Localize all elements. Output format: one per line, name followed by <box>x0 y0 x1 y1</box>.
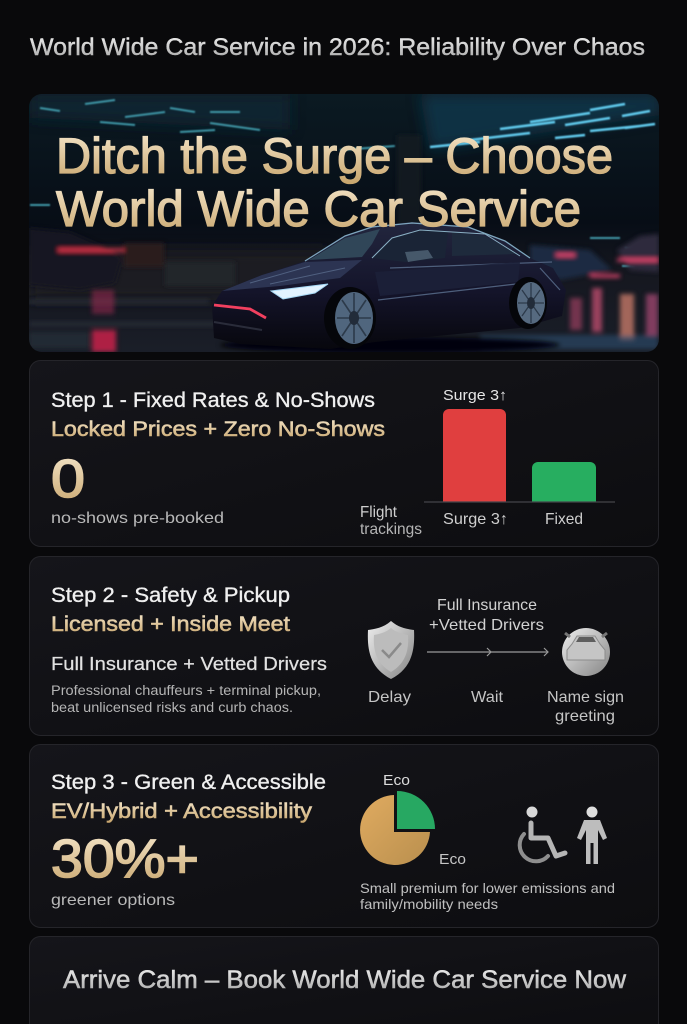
body highlights <box>378 262 560 300</box>
bar chart: Surge 3↑ <box>443 387 507 404</box>
pickup flow label <box>429 597 544 634</box>
blurred left car <box>29 228 235 290</box>
hero headline: World Wide Car Service <box>56 181 581 237</box>
icon: wheelchair <box>520 806 565 861</box>
step 2 lead: Full Insurance + Vetted Drivers <box>51 653 327 674</box>
arrow <box>427 648 548 656</box>
panel: step 1 <box>30 360 658 546</box>
step 3 subheading: EV/Hybrid + Accessibility <box>51 799 312 823</box>
step 2 heading: Step 2 - Safety & Pickup <box>51 583 290 607</box>
flow labels: Name sign <box>547 689 624 706</box>
ceiling lights <box>30 100 655 266</box>
hero headline: Ditch the Surge – Choose <box>56 128 613 184</box>
pie chart <box>360 772 466 868</box>
stat: zero: 0 <box>51 449 85 509</box>
stat caption: no-shows pre-booked <box>51 510 224 527</box>
red light bar <box>214 305 266 318</box>
bar chart: Fixed <box>545 511 583 528</box>
car <box>212 222 566 353</box>
hero headline <box>56 128 613 237</box>
panel: call to action <box>30 936 658 1024</box>
flow labels <box>368 689 624 725</box>
step 2 description: beat unlicensed risks and curb chaos. <box>51 700 293 715</box>
step 2 description: Professional chauffeurs + terminal pickup, <box>51 683 321 698</box>
stat caption: greener options <box>51 892 175 909</box>
bar chart: Surge 3↑ <box>443 511 508 528</box>
step 3 note: Small premium for lower emissions and <box>360 880 615 896</box>
blurred right cars <box>530 234 659 280</box>
ceiling glow <box>29 94 660 300</box>
headlight <box>271 284 328 299</box>
pickup flow label: Full Insurance <box>437 597 537 614</box>
hood <box>222 260 362 291</box>
step 1 subheading: Locked Prices + Zero No-Shows <box>51 417 385 441</box>
bar chart: trackings <box>360 521 422 538</box>
title: World Wide Car Service in 2026: Reliability Over Chaos <box>30 34 645 61</box>
pie chart: Eco <box>383 772 410 789</box>
bar chart <box>360 387 615 538</box>
pillar <box>397 135 421 230</box>
step 3 heading: Step 3 - Green & Accessible <box>51 770 326 794</box>
icon: car badge <box>562 628 610 676</box>
step 3 note: family/mobility needs <box>360 896 498 912</box>
pie chart: Eco <box>439 851 466 868</box>
bar chart: Flight <box>360 504 398 521</box>
flow labels: Wait <box>471 689 504 706</box>
flow labels: Delay <box>368 689 411 706</box>
call to action text: Arrive Calm – Book World Wide Car Service Now <box>63 966 627 994</box>
step 2 subheading: Licensed + Inside Meet <box>51 612 290 636</box>
step 1 heading: Step 1 - Fixed Rates & No-Shows <box>51 388 375 412</box>
panel: step 3 <box>30 744 658 928</box>
flow labels: greeting <box>555 708 615 725</box>
icon: person <box>577 806 607 864</box>
step 2 description <box>51 683 321 715</box>
icon: shield <box>368 621 414 679</box>
step 3 note <box>360 880 615 912</box>
rear wheel <box>509 277 547 329</box>
wet floor reflections <box>29 288 658 352</box>
pickup flow label: +Vetted Drivers <box>429 617 544 634</box>
stat: 30%+: 30%+ <box>51 829 199 889</box>
panel: step 2 <box>30 556 658 736</box>
panel: hero image <box>29 94 660 353</box>
front wheel <box>324 287 376 338</box>
